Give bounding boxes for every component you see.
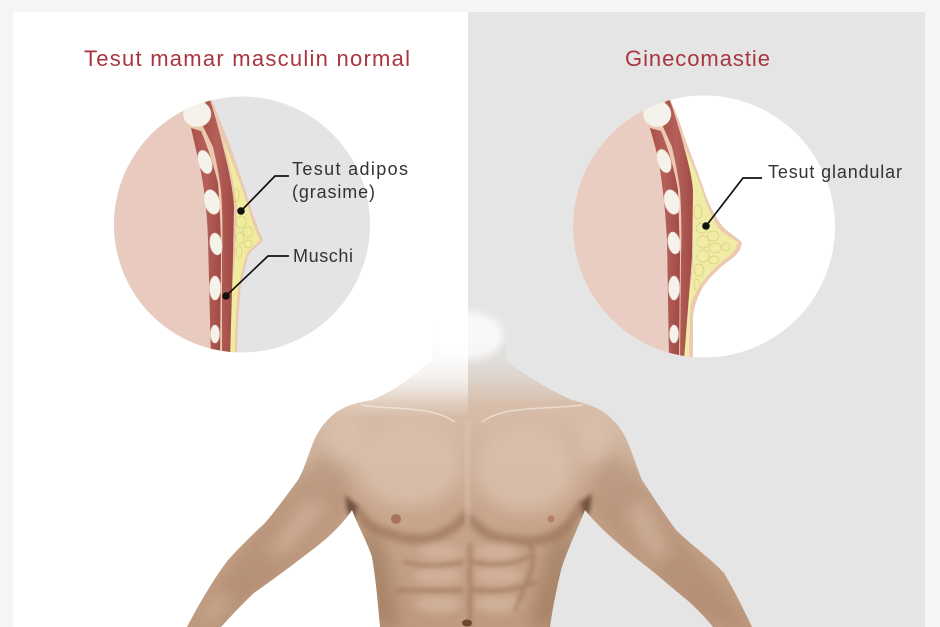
diagram: gynecomastia cross-section circle [550,90,902,360]
label: fat tissue: Tesut adipos [292,159,408,179]
leader: fat tissue [237,176,289,215]
pectoral highlights [325,415,611,512]
glandular cells [694,205,730,291]
leader: glandular tissue [702,178,762,230]
abdominal muscle blocks [414,544,522,613]
label: muscle: Muschi [293,246,353,266]
chest cavity [114,110,210,348]
skin layer [184,100,263,352]
inner muscle [650,128,680,360]
left nipple [391,514,401,524]
leader: muscle [222,256,289,300]
panel: normal tissue (white) [13,12,468,627]
sternum light seam [465,420,470,525]
outer muscle [661,100,693,360]
chest cavity [573,111,669,352]
arm highlights [195,500,672,625]
lower pectoral creases [358,505,581,541]
torso silhouette [187,318,752,627]
glandular layer [684,145,738,357]
panel: gynecomastia (grey) [468,12,925,627]
right nipple [548,516,554,522]
armpit shadows [345,493,592,522]
chin fade [432,312,504,360]
skin layer [640,90,742,360]
outer muscle [201,100,234,360]
diagram: normal tissue cross-section circle [114,96,408,352]
navel [462,620,472,626]
ribs [643,101,682,343]
inner muscle [191,128,221,360]
heading: gynecomastia: Ginecomastie [625,46,770,71]
abdominal grooves [398,545,535,627]
label: fat tissue: (grasime) [292,182,375,202]
left-half neck fade [338,342,468,412]
fat cells [233,188,253,258]
body edge shading [214,453,737,627]
ribs [183,101,224,343]
fat layer [222,137,260,360]
clavicle lines [361,405,583,422]
shading and muscle definition [220,342,737,627]
heading: normal male breast tissue: Tesut mamar masculin normal [84,46,410,71]
label: glandular tissue: Tesut glandular [768,162,902,182]
male torso illustration [187,310,752,627]
